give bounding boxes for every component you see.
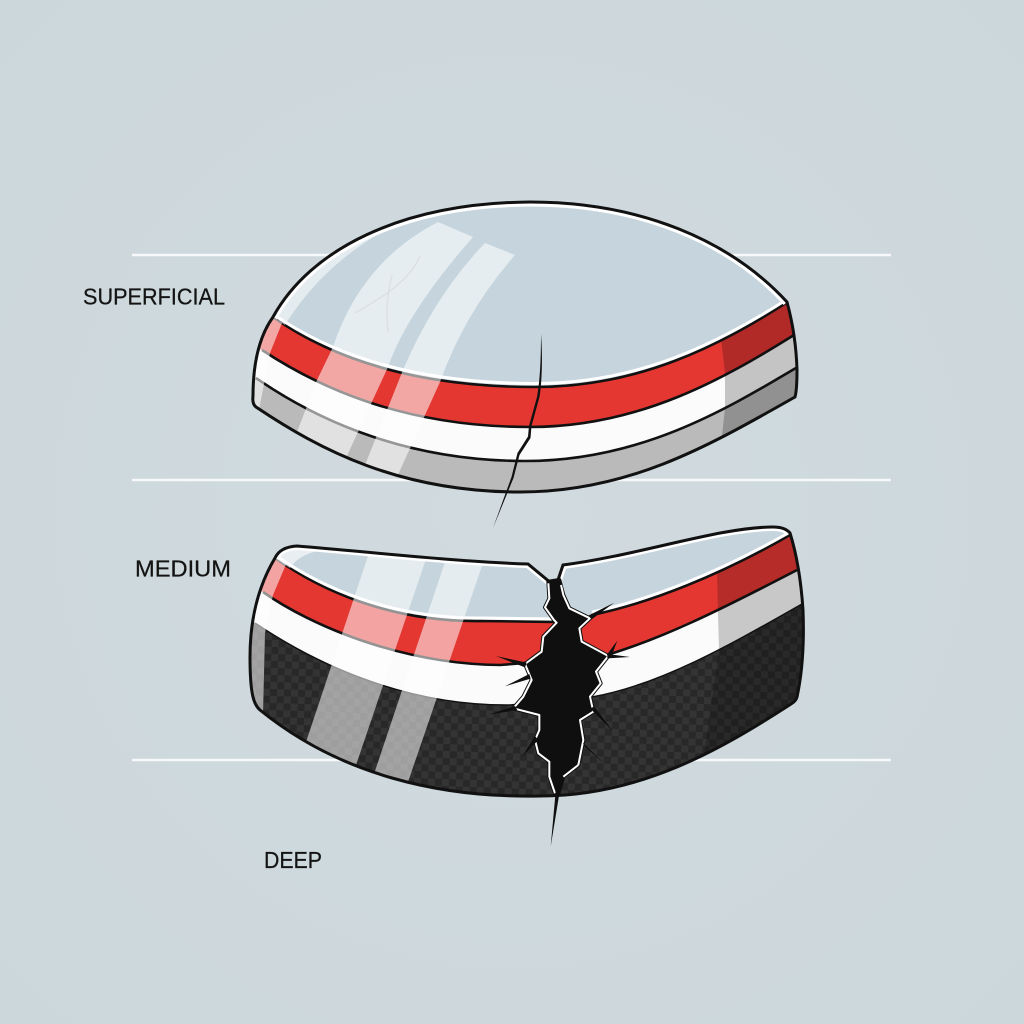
layer: dark textured base (252, 605, 802, 795)
layer: clear coat (275, 527, 790, 622)
corner glow (276, 550, 315, 568)
jagged crack (488, 580, 630, 847)
right side shade (722, 304, 796, 436)
glare band: narrow (374, 556, 484, 785)
crack spikes (488, 603, 630, 847)
layer: red (262, 536, 797, 664)
scratch marks (355, 256, 420, 332)
hairline crack (493, 334, 542, 528)
glare band: wide (306, 550, 428, 768)
white rim above red (275, 532, 790, 619)
layer: clear coat (273, 202, 787, 387)
rim highlight along the top (275, 527, 790, 583)
layer: grey base (254, 370, 796, 490)
glare band: left edge (254, 318, 282, 408)
layer boundary lines (256, 303, 796, 461)
upper lens: superficial damage (251, 200, 798, 528)
label: deep: DEEP (264, 847, 322, 873)
label: medium: MEDIUM (135, 556, 231, 582)
layer: white (255, 338, 796, 460)
lower lens: deep damage (248, 526, 805, 846)
corner glow (274, 236, 376, 325)
outer outline (250, 527, 803, 796)
crack white edges (513, 583, 608, 793)
glare band: left edge (252, 558, 286, 710)
crack black body (513, 580, 608, 793)
glare band: wide (297, 222, 473, 458)
outer outline (253, 202, 797, 492)
layer boundary lines (255, 535, 802, 705)
infographic canvas (84, 200, 891, 868)
white rim above red (273, 300, 786, 384)
reference lines (132, 255, 891, 760)
layer: white (254, 571, 801, 704)
right side shade (706, 536, 802, 750)
rim highlight along the top (273, 202, 787, 317)
label: superficial: SUPERFICIAL (83, 284, 225, 310)
layer: red (260, 304, 792, 426)
glare band: narrow (365, 243, 515, 477)
